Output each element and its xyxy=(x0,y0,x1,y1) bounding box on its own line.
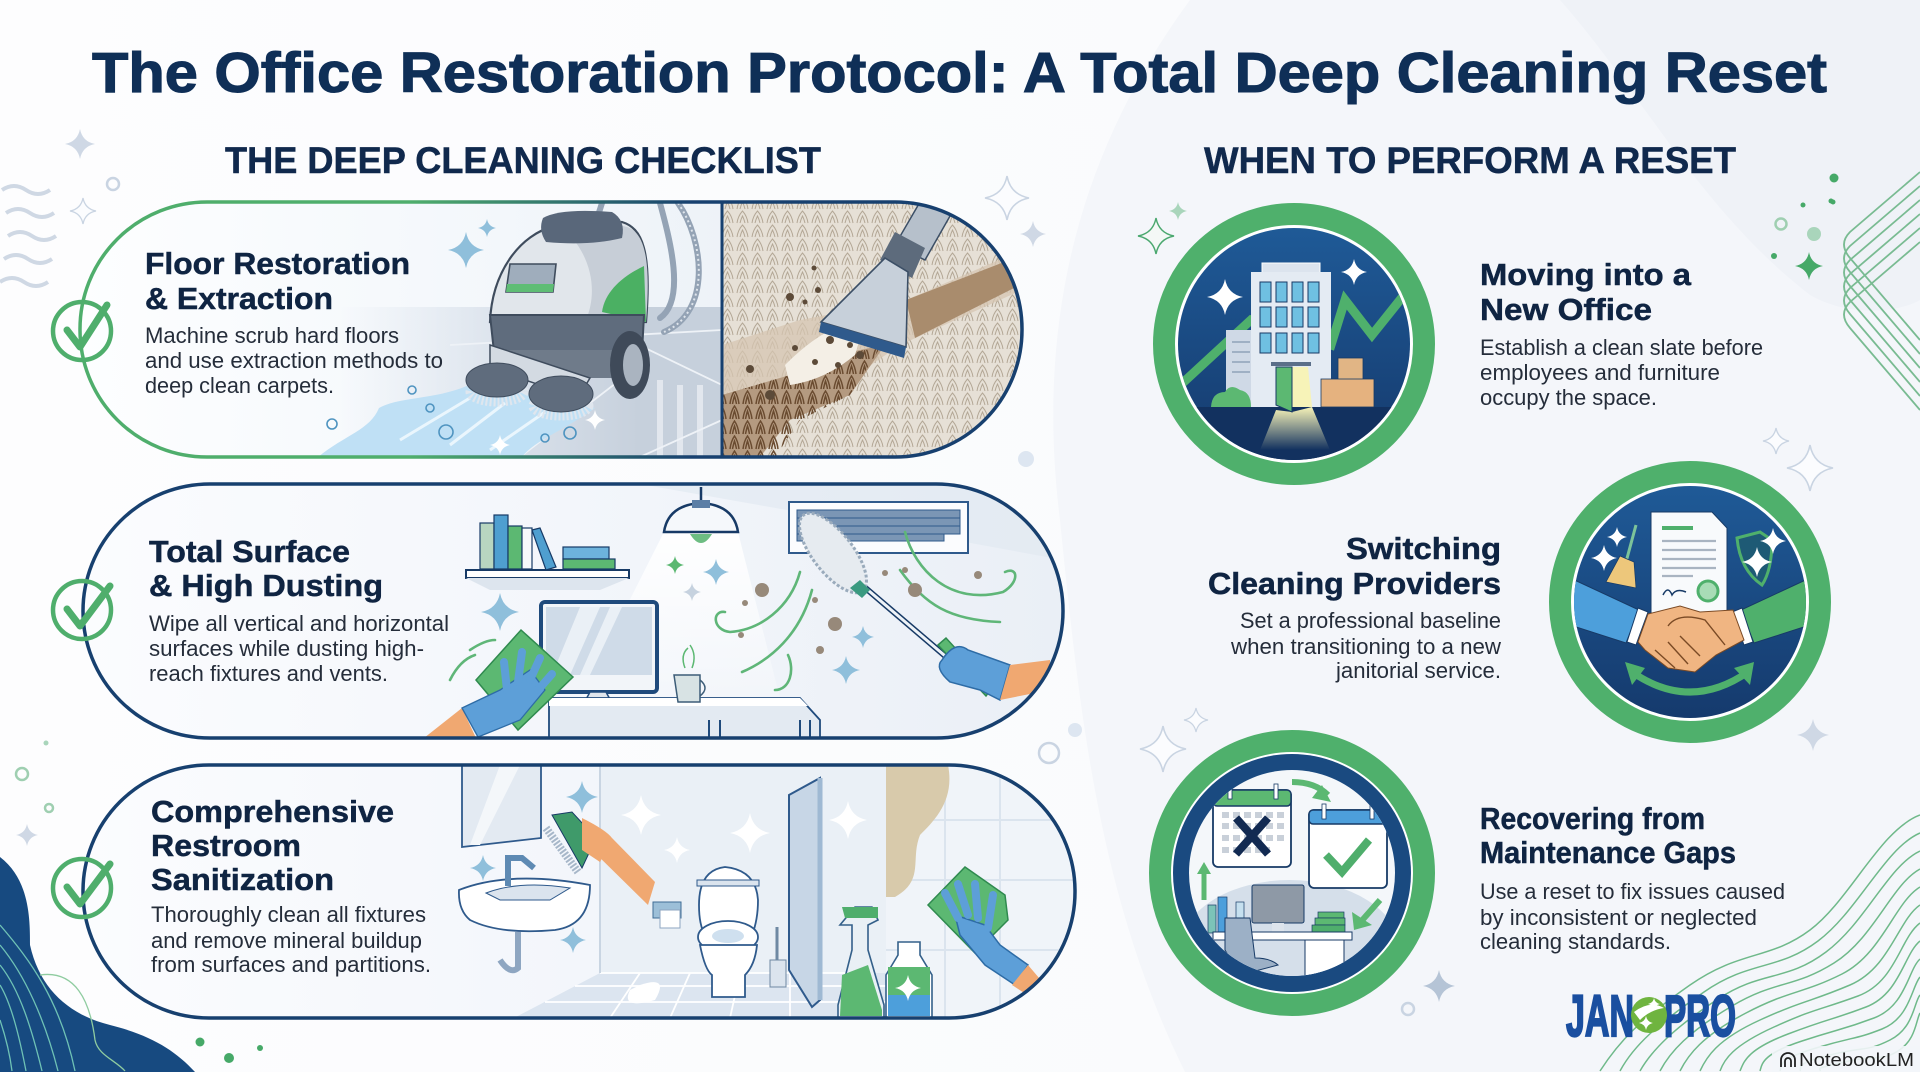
panel outline xyxy=(83,484,1063,738)
text: moving into a new office: Moving into a xyxy=(1480,257,1692,292)
divider xyxy=(720,202,724,457)
text: recovering from maintenance gaps: Use a reset to fix issues caused xyxy=(1480,879,1785,904)
panel: total surface and high dusting xyxy=(53,484,1063,738)
text: total surface: surfaces while dusting high- xyxy=(149,636,424,661)
icon: recovering from maintenance gaps xyxy=(1160,741,1424,1020)
text: moving into a new office: Establish a clean slate before xyxy=(1480,335,1763,360)
panel outline xyxy=(83,765,1075,1018)
text: recovering from maintenance gaps: cleaning standards. xyxy=(1480,929,1671,954)
panel: comprehensive restroom sanitization xyxy=(53,765,1076,1018)
text: floor restoration xyxy=(145,246,443,398)
text: comprehensive restroom: Restroom xyxy=(151,828,301,863)
text: moving into a new office xyxy=(1480,257,1763,410)
heading: when to perform a reset: WHEN TO PERFORM A RESET xyxy=(1204,140,1736,181)
logo: JAN-PRO: PRO xyxy=(1664,984,1736,1049)
title: The Office Restoration Protocol: A Total Deep Cleaning Reset xyxy=(92,41,1827,105)
heading: the deep cleaning checklist: THE DEEP CLEANING CHECKLIST xyxy=(225,140,821,181)
text: recovering from maintenance gaps xyxy=(1480,801,1785,954)
text: comprehensive restroom: Comprehensive xyxy=(151,794,394,829)
text: comprehensive restroom xyxy=(151,794,431,977)
check icon xyxy=(53,859,111,917)
text: floor restoration: Floor Restoration xyxy=(145,246,410,281)
logo: JAN-PRO xyxy=(1566,984,1736,1049)
text: switching cleaning providers: Cleaning Providers xyxy=(1208,566,1501,601)
text: switching cleaning providers: Set a professional baseline xyxy=(1240,608,1501,633)
check icon xyxy=(53,581,111,639)
text: switching cleaning providers: Switching xyxy=(1346,531,1501,566)
text: total surface: Wipe all vertical and horizontal xyxy=(149,611,449,636)
watermark: NotebookLM xyxy=(1772,1046,1920,1072)
panel: floor restoration and extraction xyxy=(53,202,1022,457)
text: comprehensive restroom: from surfaces and partitions. xyxy=(151,952,431,977)
illustration: office dusting scene xyxy=(424,484,1063,738)
text: comprehensive restroom: and remove mineral buildup xyxy=(151,928,422,953)
check icon xyxy=(53,302,111,360)
text: floor restoration: deep clean carpets. xyxy=(145,373,334,398)
text: total surface: Total Surface xyxy=(149,534,350,569)
text: moving into a new office: occupy the space. xyxy=(1480,385,1657,410)
text: floor restoration: and use extraction methods to xyxy=(145,348,443,373)
text: switching cleaning providers: when transitioning to a new xyxy=(1230,634,1501,659)
text: switching cleaning providers: janitorial service. xyxy=(1335,658,1501,683)
text: total surface: reach fixtures and vents. xyxy=(149,661,388,686)
text: comprehensive restroom: Thoroughly clean all fixtures xyxy=(151,902,426,927)
illustration: floor scrubber machine xyxy=(318,203,722,457)
text: recovering from maintenance gaps: by inconsistent or neglected xyxy=(1480,905,1757,930)
text: switching cleaning providers xyxy=(1208,531,1501,683)
watermark: NotebookLM: NotebookLM xyxy=(1799,1049,1914,1070)
text: moving into a new office: New Office xyxy=(1480,292,1652,327)
illustration: carpet extraction xyxy=(722,202,1022,457)
text: floor restoration: & Extraction xyxy=(145,281,333,316)
text: floor restoration: Machine scrub hard floors xyxy=(145,323,399,348)
text: total surface: & High Dusting xyxy=(149,568,383,603)
illustration: restroom scene xyxy=(459,765,1076,1018)
text: recovering from maintenance gaps: Maintenance Gaps xyxy=(1480,835,1736,870)
text: moving into a new office: employees and furniture xyxy=(1480,360,1720,385)
icon: switching cleaning providers xyxy=(1560,472,1820,732)
icon: moving into a new office xyxy=(1164,214,1424,474)
text: total surface xyxy=(149,534,449,686)
logo: JAN-PRO: JAN xyxy=(1566,984,1634,1049)
text: comprehensive restroom: Sanitization xyxy=(151,862,334,897)
panel outline xyxy=(80,202,1022,457)
text: recovering from maintenance gaps: Recovering from xyxy=(1480,801,1705,836)
